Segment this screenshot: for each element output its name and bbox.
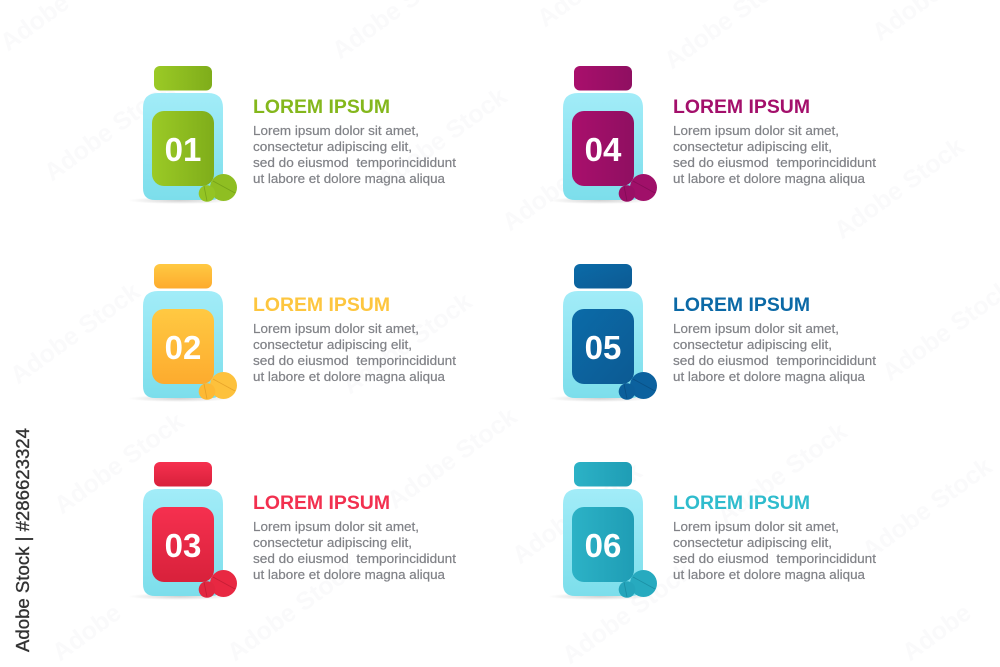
- text block 03: consectetur adipiscing elit,: [253, 535, 412, 550]
- background watermark: Adobe Stock: [337, 287, 477, 400]
- icon: bottle 04: [548, 66, 657, 204]
- icon: bottle 06: [548, 462, 657, 600]
- text block 02: consectetur adipiscing elit,: [253, 337, 412, 352]
- icon: bottle 01: 01: [165, 131, 201, 168]
- icon: bottle 05: 05: [585, 329, 621, 366]
- background watermark: Adobe Stock: [5, 277, 145, 390]
- text block 01: ut labore et dolore magna aliqua: [253, 171, 446, 186]
- background watermark: Adobe Stock: [49, 407, 189, 520]
- text block 06: sed do eiusmod temporincididunt: [673, 551, 876, 566]
- text block 06: ut labore et dolore magna aliqua: [673, 567, 866, 582]
- icon: bottle 02: [128, 264, 237, 402]
- text block 05: [673, 321, 876, 384]
- background watermark: Adobe Stock: [857, 452, 997, 565]
- background watermark: Adobe Stock: [497, 124, 637, 237]
- background watermark: Adobe Stock: [382, 402, 522, 515]
- text block 03: [253, 519, 456, 582]
- heading 02: LOREM IPSUM: [253, 295, 390, 316]
- heading 01: LOREM IPSUM: [253, 97, 390, 118]
- background watermark: Adobe Stock: [222, 554, 362, 667]
- icon: bottle 05: [548, 264, 657, 402]
- heading 05: LOREM IPSUM: [673, 295, 810, 316]
- text block 06: Lorem ipsum dolor sit amet,: [673, 519, 839, 534]
- background watermark: Adobe Stock: [557, 557, 697, 667]
- heading 04: LOREM IPSUM: [673, 97, 810, 118]
- background watermark: Adobe: [897, 598, 977, 667]
- text block 02: ut labore et dolore magna aliqua: [253, 369, 446, 384]
- background watermark: Adobe Stock: [39, 74, 179, 187]
- text block 03: ut labore et dolore magna aliqua: [253, 567, 446, 582]
- text block 01: sed do eiusmod temporincididunt: [253, 155, 456, 170]
- text block 01: Lorem ipsum dolor sit amet,: [253, 123, 419, 138]
- text block 04: [673, 123, 876, 186]
- text block 05: sed do eiusmod temporincididunt: [673, 353, 876, 368]
- background watermark: Adobe: [47, 598, 127, 667]
- text block 02: sed do eiusmod temporincididunt: [253, 353, 456, 368]
- text block 02: Lorem ipsum dolor sit amet,: [253, 321, 419, 336]
- text block 02: [253, 321, 456, 384]
- item 02: yellow bottle with text: [128, 264, 456, 402]
- text block 04: consectetur adipiscing elit,: [673, 139, 832, 154]
- text block 05: consectetur adipiscing elit,: [673, 337, 832, 352]
- background watermark: Adobe Stock: [712, 417, 852, 530]
- icon: bottle 06: 06: [585, 527, 621, 564]
- text block 03: sed do eiusmod temporincididunt: [253, 551, 456, 566]
- heading 06: LOREM IPSUM: [673, 493, 810, 514]
- text block 04: Lorem ipsum dolor sit amet,: [673, 123, 839, 138]
- item 05: blue bottle with text: [548, 264, 876, 402]
- stock id credit: Adobe Stock | #286623324: [13, 428, 33, 652]
- background watermark: Adobe Stock: [829, 132, 969, 245]
- icon: bottle 03: 03: [165, 527, 201, 564]
- background watermark: Adobe Stock: [372, 82, 512, 195]
- item 04: magenta bottle with text: [548, 66, 876, 204]
- text block 03: Lorem ipsum dolor sit amet,: [253, 519, 419, 534]
- text block 01: [253, 123, 456, 186]
- text block 05: ut labore et dolore magna aliqua: [673, 369, 866, 384]
- background watermark: Adobe Stock: [507, 457, 647, 570]
- item 01: green bottle with text: [128, 66, 456, 204]
- text block 05: Lorem ipsum dolor sit amet,: [673, 321, 839, 336]
- text block 06: [673, 519, 876, 582]
- item 06: teal bottle with text: [548, 462, 876, 600]
- icon: bottle 01: [128, 66, 237, 204]
- text block 06: consectetur adipiscing elit,: [673, 535, 832, 550]
- text block 01: consectetur adipiscing elit,: [253, 139, 412, 154]
- item 03: red bottle with text: [128, 462, 456, 600]
- icon: bottle 03: [128, 462, 237, 600]
- text block 04: ut labore et dolore magna aliqua: [673, 171, 866, 186]
- icon: bottle 04: 04: [585, 131, 622, 168]
- text block 04: sed do eiusmod temporincididunt: [673, 155, 876, 170]
- icon: bottle 02: 02: [165, 329, 201, 366]
- heading 03: LOREM IPSUM: [253, 493, 390, 514]
